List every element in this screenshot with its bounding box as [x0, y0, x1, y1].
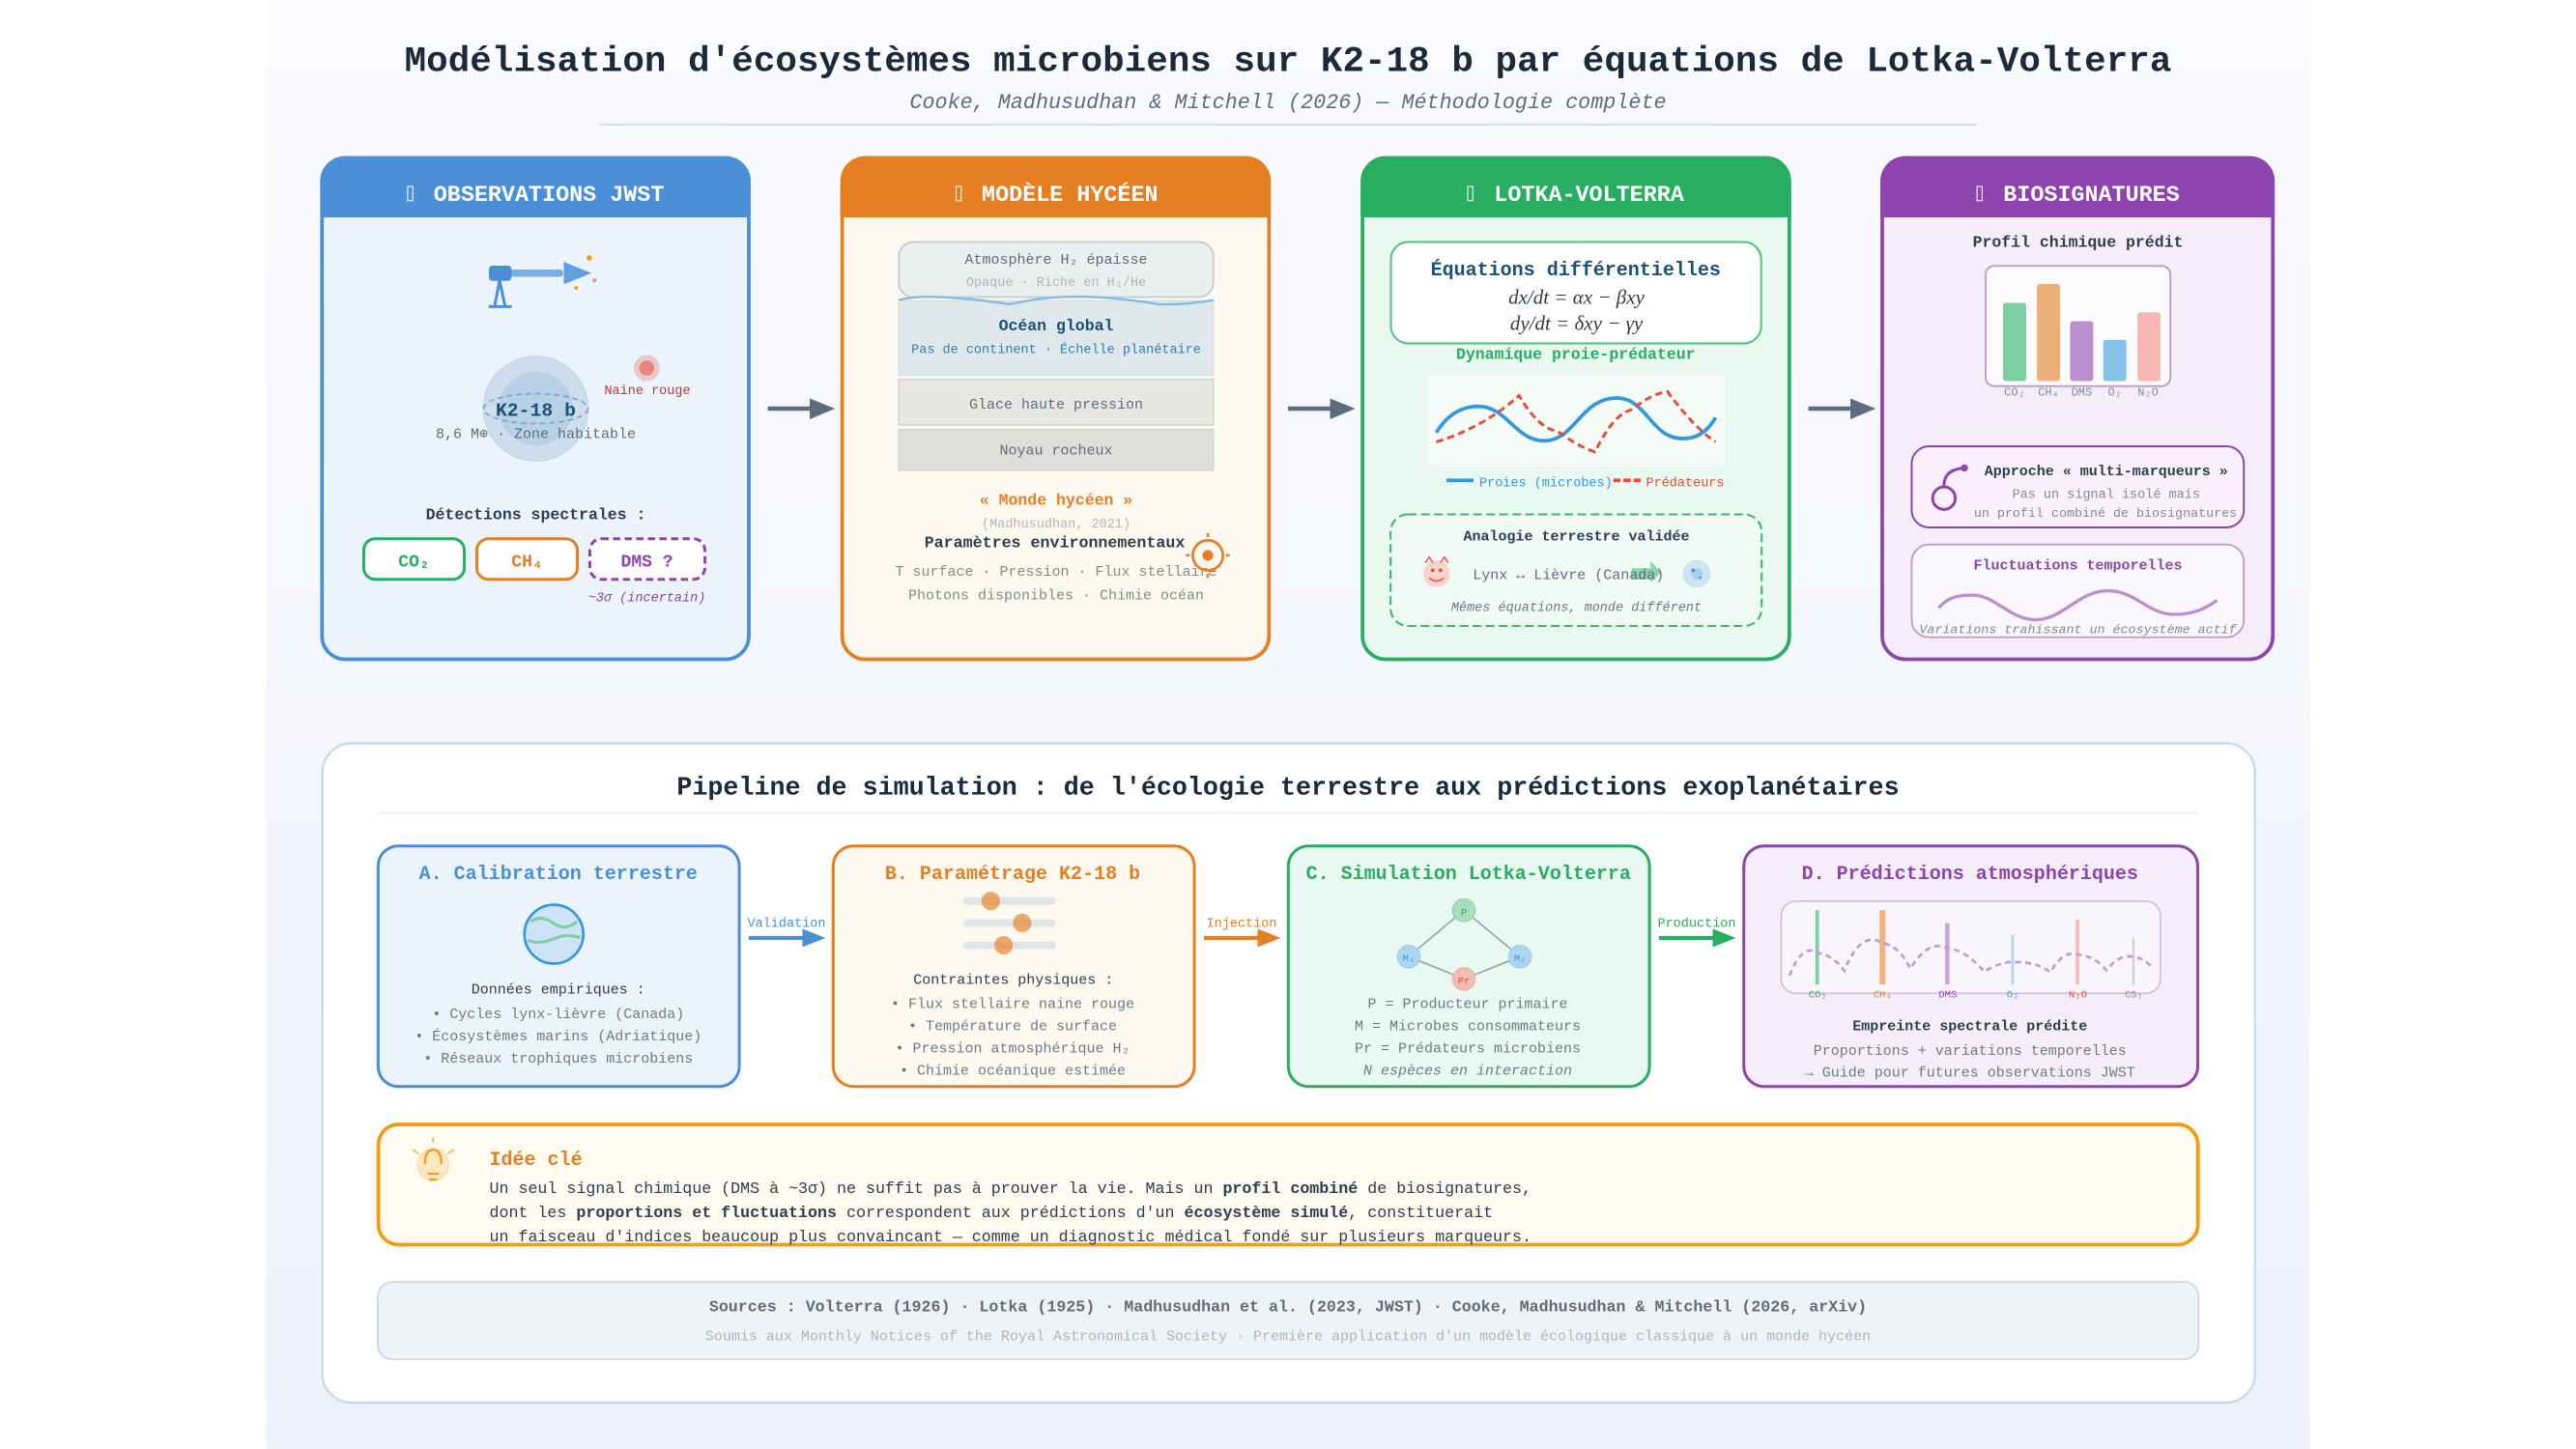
box: temporal fluctuations: Variations trahissant un écosystème actif — [1919, 624, 2238, 639]
step A: terrestrial calibration: • Écosystèmes marins (Adriatique) — [415, 1028, 701, 1045]
step B: K2-18 b parametrisation — [833, 846, 1194, 1087]
badge: CH4: CH₄ — [511, 554, 543, 573]
step D: atmospheric predictions — [1744, 846, 2198, 1087]
badge: CO2 — [363, 539, 465, 580]
diagram: trophic network: P — [1461, 907, 1467, 919]
chart: predicted chemical profile bars — [1986, 266, 2170, 400]
panel: hycean model — [841, 156, 1271, 659]
header: hycean model — [841, 156, 1271, 217]
legend: prey and predators: Prédateurs — [1646, 477, 1725, 492]
diagram: trophic network: M₁ — [1403, 953, 1415, 965]
icon: magnifier marker — [1932, 465, 1968, 509]
diagram: trophic network — [1397, 899, 1531, 990]
step C: Lotka-Volterra simulation — [1288, 846, 1649, 1087]
chart: predicted spectrum: CS₂ — [2125, 989, 2143, 1001]
chart: predicted chemical profile bars: DMS — [2072, 386, 2092, 400]
layer: ice — [899, 380, 1214, 425]
arrow: injection — [1204, 917, 1281, 947]
step C: Lotka-Volterra simulation: M = Microbes consommateurs — [1355, 1018, 1581, 1036]
step C: Lotka-Volterra simulation: N espèces en interaction — [1363, 1064, 1572, 1080]
chart: prey-predator curves — [1427, 374, 1725, 467]
icon: planet K2-18 b: K2-18 b — [496, 401, 576, 422]
icon: arrow to microbe — [1632, 561, 1661, 582]
caption: hycean world — [980, 492, 1132, 532]
step B: K2-18 b parametrisation: Contraintes physiques : — [913, 972, 1113, 989]
arrow: model to Lotka-Volterra — [1288, 398, 1356, 419]
chart: predicted spectrum: N₂O — [2069, 989, 2087, 1001]
chart: predicted chemical profile bars: O₂ — [2108, 386, 2122, 400]
diagram: trophic network: M₂ — [1514, 953, 1526, 965]
step D: atmospheric predictions: Proportions + variations temporelles — [1814, 1043, 2127, 1060]
step C: Lotka-Volterra simulation: C. Simulation Lotka-Volterra — [1306, 864, 1631, 886]
step A: terrestrial calibration — [378, 846, 739, 1087]
layer: ocean — [899, 297, 1214, 375]
layer: ocean: Océan global — [999, 317, 1114, 335]
footer: sources: Sources : Volterra (1926) · Lotka (1925) · Madhusudhan et al. (2023, JWST) · Cooke, Madhusudhan & Mitchell (2026, arXiv) — [709, 1297, 1867, 1316]
text: environmental parameters: T surface · Pression · Flux stellaire — [895, 564, 1217, 581]
text: environmental parameters: Paramètres environnementaux — [925, 534, 1185, 553]
step A: terrestrial calibration: Données empiriques : — [472, 982, 645, 999]
layer: rocky core: Noyau rocheux — [999, 443, 1113, 460]
arrow: production: Production — [1657, 917, 1736, 931]
callout: key idea — [379, 1124, 2198, 1246]
text: key idea: Idée clé — [489, 1150, 583, 1172]
heading: prey-predator dynamics: Dynamique proie-prédateur — [1456, 345, 1696, 363]
box: terrestrial analogy: Mêmes équations, monde différent — [1451, 602, 1702, 616]
box: differential equations: Équations différentielles — [1431, 259, 1721, 282]
panel: biosignatures — [1880, 156, 2275, 659]
diagram: trophic network: Pr — [1458, 977, 1470, 988]
header: observations — [320, 156, 751, 217]
step D: atmospheric predictions: → Guide pour futures observations JWST — [1805, 1065, 2135, 1082]
legend: prey and predators: Proies (microbes) — [1479, 477, 1613, 492]
box: multi-marker approach: Pas un signal isolé mais — [2013, 489, 2200, 503]
header: biosignatures: BIOSIGNATURES — [2003, 184, 2180, 209]
header: Lotka-Volterra: LOTKA-VOLTERRA — [1494, 184, 1685, 209]
layer: atmosphere — [899, 242, 1214, 298]
icon: microbe — [1683, 560, 1710, 587]
header: biosignatures — [1880, 156, 2275, 217]
box: differential equations — [1391, 242, 1761, 344]
header: hycean model: MODÈLE HYCÉEN — [982, 182, 1159, 209]
panel: observations JWST — [320, 156, 751, 659]
step B: K2-18 b parametrisation: • Flux stellaire naine rouge — [891, 997, 1134, 1013]
text: key idea: un faisceau d'indices beaucoup plus convaincant — comme un diagnostic médical fondé sur plusieurs marqueurs. — [489, 1228, 1531, 1246]
panel: Lotka-Volterra — [1360, 156, 1791, 659]
icon: earth globe — [525, 905, 584, 964]
footer: sources: Soumis aux Monthly Notices of the Royal Astronomical Society · Première application d'un modèle écologique classique à un monde hycéen — [705, 1329, 1871, 1346]
arrow: validation — [747, 917, 826, 947]
icon: planet K2-18 b: 8,6 M⊕ · Zone habitable — [436, 427, 636, 443]
box: differential equations: dx/dt = αx − βxy — [1508, 285, 1646, 308]
caption: hycean world: (Madhusudhan, 2021) — [982, 518, 1131, 532]
header: Lotka-Volterra — [1360, 156, 1791, 217]
box: multi-marker approach — [1911, 446, 2244, 527]
layer: ocean: Pas de continent · Échelle planétaire — [911, 342, 1201, 357]
icon: sliders — [963, 892, 1056, 954]
subtitle: Cooke, Madhusudhan & Mitchell (2026) — Méthodologie complète — [909, 91, 1667, 115]
icon: red dwarf — [604, 355, 691, 399]
box: multi-marker approach: Approche « multi-marqueurs » — [1985, 464, 2228, 480]
layer: rocky core — [899, 430, 1214, 470]
heading: predicted chemical profile: Profil chimique prédit — [1973, 233, 2183, 251]
chart: predicted spectrum: CO₂ — [1809, 989, 1827, 1001]
badge: DMS: DMS ? — [621, 554, 673, 573]
box: temporal fluctuations: Fluctuations temporelles — [1973, 558, 2183, 575]
badge: CH4 — [476, 539, 578, 580]
text: environmental parameters — [895, 534, 1217, 605]
chart: predicted chemical profile bars: N₂O — [2137, 386, 2159, 400]
box: temporal fluctuations — [1911, 545, 2244, 638]
step B: K2-18 b parametrisation: • Température de surface — [908, 1018, 1117, 1036]
legend: prey and predators — [1446, 477, 1725, 492]
icon: lynx — [1423, 557, 1449, 587]
caption: hycean world: « Monde hycéen » — [980, 492, 1132, 510]
arrow: validation: Validation — [747, 917, 826, 931]
step C: Lotka-Volterra simulation: Pr = Prédateurs microbiens — [1355, 1041, 1581, 1058]
arrow: Lotka-Volterra to biosignatures — [1809, 398, 1875, 419]
layer: ice: Glace haute pression — [969, 397, 1143, 413]
panel: simulation pipeline — [323, 744, 2255, 1403]
heading: pipeline: Pipeline de simulation : de l'écologie terrestre aux prédictions exoplanétaires — [676, 774, 1900, 803]
icon: red dwarf: Naine rouge — [604, 384, 691, 399]
chart: predicted chemical profile bars: CH₄ — [2038, 386, 2059, 400]
badge: CO2: CO₂ — [398, 554, 430, 573]
text: key idea: dont les proportions et fluctuations correspondent aux prédictions d'un écosystème simulé, constituerait — [489, 1204, 1493, 1222]
arrow: injection: Injection — [1207, 917, 1276, 931]
layer: atmosphere: Atmosphère H₂ épaisse — [964, 252, 1148, 269]
box: terrestrial analogy: Lynx ↔ Lièvre (Canada) — [1473, 568, 1664, 584]
icon: light bulb — [413, 1138, 454, 1180]
header: observations: OBSERVATIONS JWST — [434, 184, 664, 209]
heading: spectral detections: Détections spectrales : — [426, 505, 645, 524]
step D: atmospheric predictions: Empreinte spectrale prédite — [1852, 1018, 2087, 1036]
chart: predicted chemical profile bars: CO₂ — [2004, 386, 2025, 400]
box: differential equations: dy/dt = δxy − γy — [1510, 312, 1644, 335]
page background — [267, 0, 2309, 1449]
text: environmental parameters: Photons disponibles · Chimie océan — [908, 588, 1204, 605]
step B: K2-18 b parametrisation: • Chimie océanique estimée — [900, 1064, 1126, 1080]
icon: planet K2-18 b — [436, 356, 636, 461]
step A: terrestrial calibration: A. Calibration terrestre — [419, 864, 698, 886]
step D: atmospheric predictions: D. Prédictions atmosphériques — [1802, 864, 2138, 886]
box: terrestrial analogy — [1390, 514, 1761, 626]
title: Modélisation d'écosystèmes microbiens sur K2-18 b par équations de Lotka-Volterra — [405, 43, 2171, 83]
chart: predicted spectrum: DMS — [1938, 989, 1957, 1001]
arrow: observations to model — [767, 398, 835, 419]
box: multi-marker approach: un profil combiné de biosignatures — [1974, 507, 2237, 522]
step C: Lotka-Volterra simulation: P = Producteur primaire — [1367, 997, 1568, 1013]
chart: predicted spectrum — [1781, 901, 2161, 1001]
step A: terrestrial calibration: • Cycles lynx-lièvre (Canada) — [432, 1007, 684, 1023]
chart: predicted spectrum: CH₄ — [1874, 989, 1892, 1001]
step A: terrestrial calibration: • Réseaux trophiques microbiens — [423, 1051, 693, 1067]
icon: sun — [1186, 533, 1230, 578]
chart: predicted spectrum: O₂ — [2007, 989, 2018, 1001]
arrow: production — [1657, 917, 1736, 947]
box: terrestrial analogy: Analogie terrestre validée — [1463, 529, 1690, 546]
layer: atmosphere: Opaque · Riche en H₂/He — [966, 276, 1146, 291]
icon: telescope — [489, 255, 597, 307]
step B: K2-18 b parametrisation: • Pression atmosphérique H₂ — [895, 1041, 1131, 1058]
badge: DMS: ~3σ (incertain) — [588, 592, 705, 607]
footer: sources — [378, 1282, 2198, 1359]
text: key idea — [489, 1150, 1531, 1246]
badge: DMS — [588, 539, 705, 607]
text: key idea: Un seul signal chimique (DMS à ~3σ) ne suffit pas à prouver la vie. Mais un profil combiné de biosignatures, — [489, 1179, 1531, 1198]
step B: K2-18 b parametrisation: B. Paramétrage K2-18 b — [885, 864, 1140, 886]
